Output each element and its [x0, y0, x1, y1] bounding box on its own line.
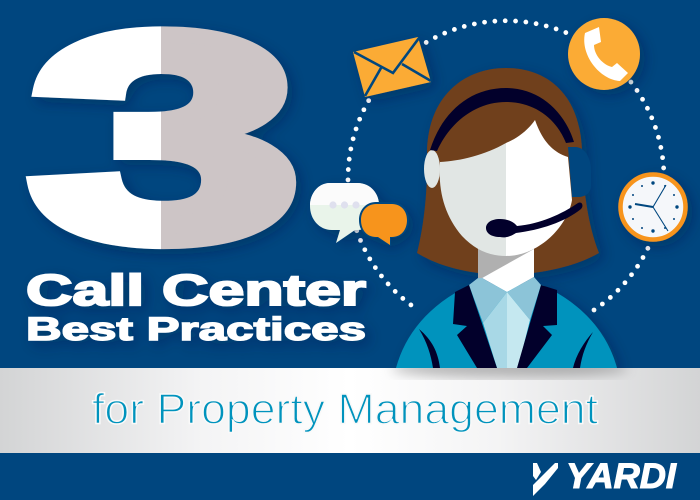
- jacket: [396, 285, 617, 368]
- shirt right: [507, 292, 530, 368]
- logo wordmark: YARDI: [566, 457, 677, 496]
- face shaded half: [440, 143, 506, 256]
- shirt left: [483, 292, 507, 368]
- title: Call Center Best Practices: Best Practices: [26, 311, 366, 347]
- pocket right: [573, 332, 593, 368]
- ear: [424, 150, 440, 188]
- hair: [417, 68, 599, 273]
- subtitle: for Property Management: [92, 386, 598, 434]
- earpiece: [568, 147, 591, 197]
- icon: envelope: [353, 37, 431, 97]
- icon: chat bubbles: [310, 183, 409, 246]
- figure: call center agent: [396, 68, 617, 368]
- white band: [0, 368, 700, 453]
- collar right: [507, 277, 541, 320]
- figure shadow on band: [390, 368, 628, 380]
- dotted ring: [348, 21, 664, 310]
- pocket left: [419, 329, 440, 368]
- face lit half: [506, 120, 572, 256]
- headband: [430, 88, 574, 151]
- collar left: [469, 278, 507, 323]
- lapel right: [517, 285, 557, 368]
- footer: [0, 453, 700, 500]
- title: Call Center Best Practices: Call Center: [26, 266, 366, 315]
- microphone: [486, 203, 582, 237]
- icon: clock: [620, 174, 686, 240]
- neck shadow: [478, 240, 534, 278]
- logo: Yardi: [533, 457, 677, 496]
- lapel left: [453, 285, 497, 368]
- title: Call Center Best Practices: [26, 266, 366, 347]
- logo mark: [533, 463, 558, 496]
- neck: [482, 249, 534, 292]
- icon: phone: [568, 18, 640, 90]
